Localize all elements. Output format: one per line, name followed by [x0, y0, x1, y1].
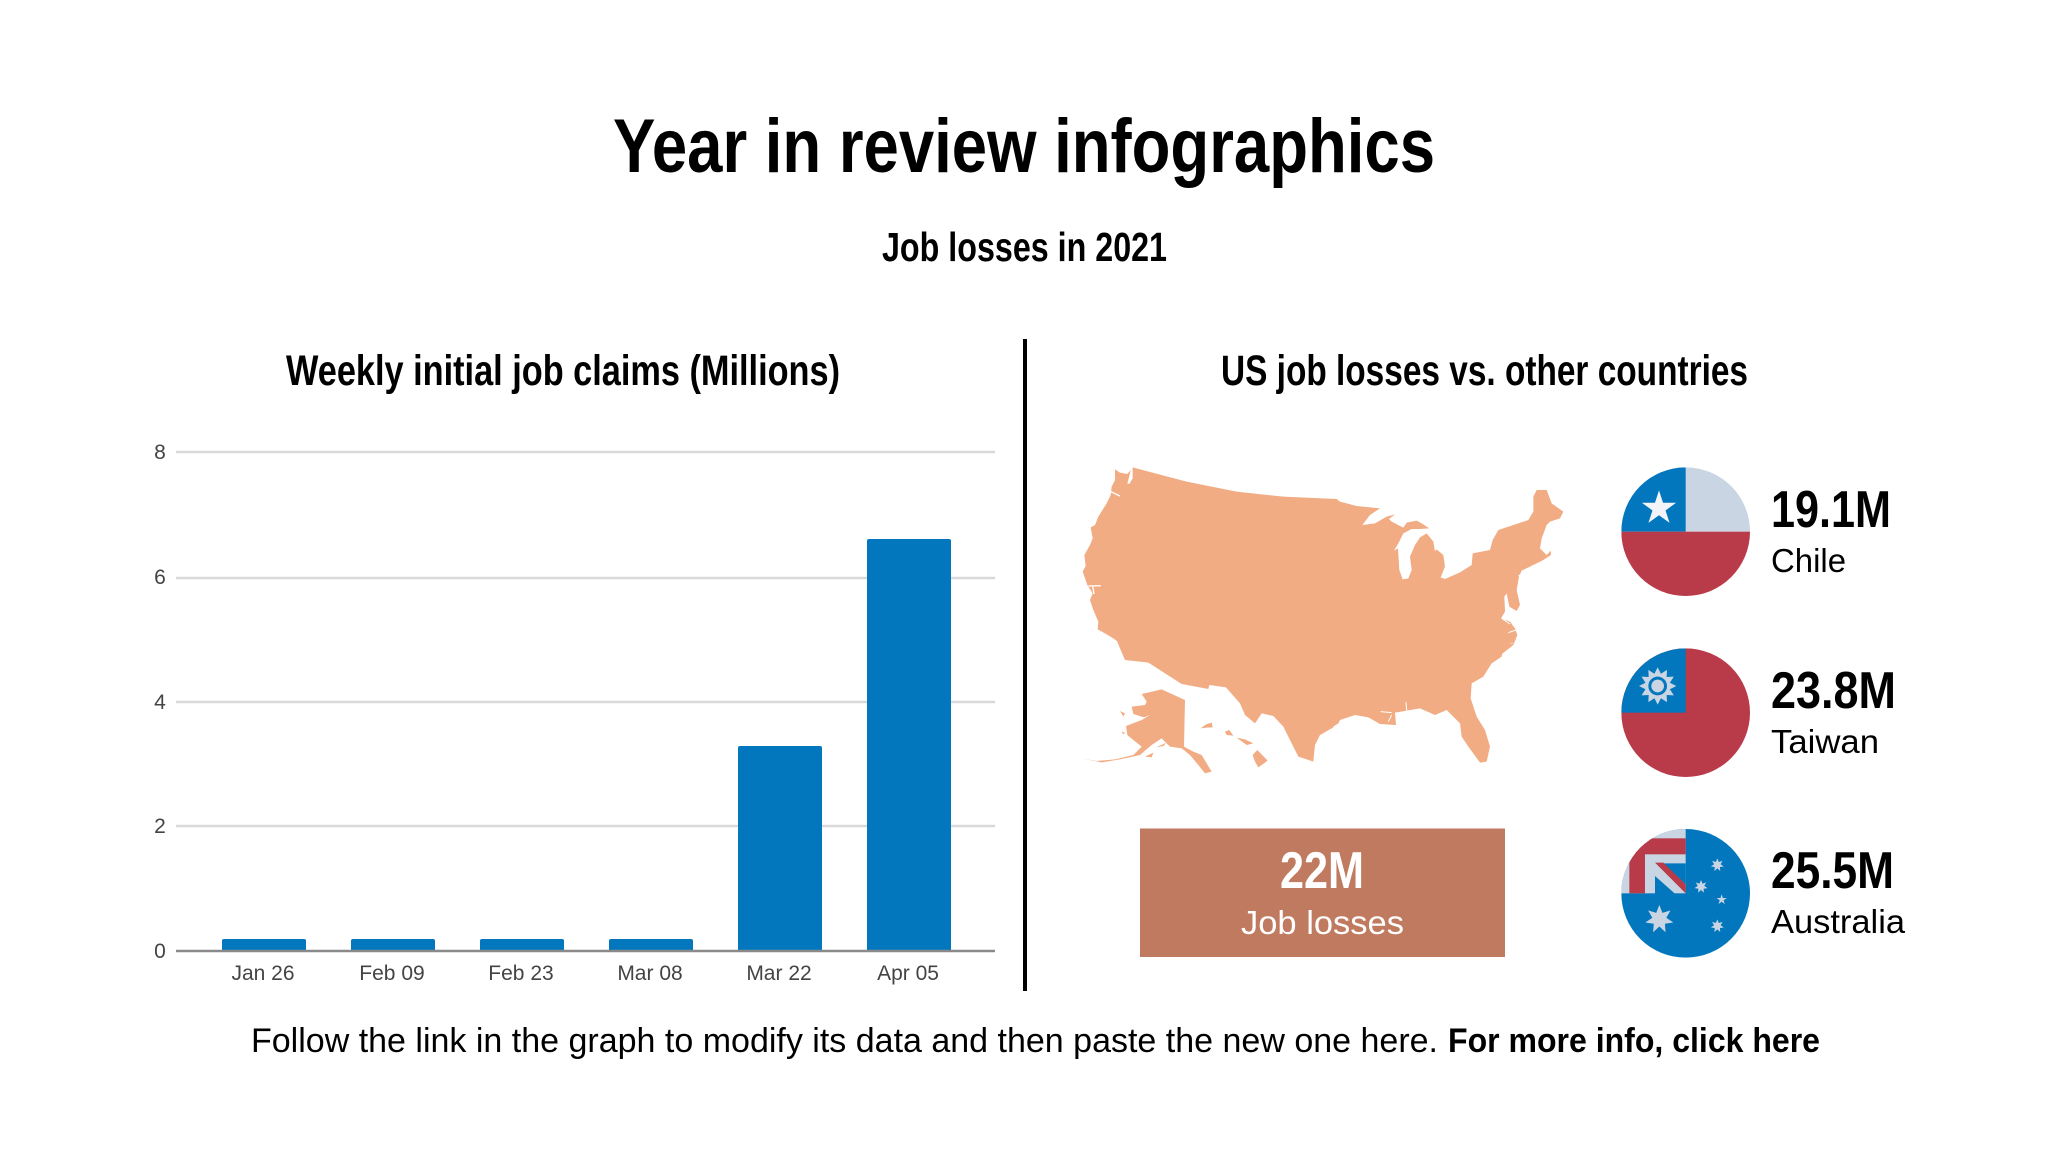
bar chart: 6	[154, 566, 166, 589]
heading: weekly job claims: Weekly initial job claims (Millions)	[286, 347, 840, 395]
stat: Chile 19.1M: 19.1M	[1771, 481, 1891, 539]
bar chart: Mar 08	[617, 962, 683, 985]
subtitle: Job losses in 2021	[882, 224, 1167, 270]
callout: 22M job losses: 22M	[1280, 842, 1364, 900]
panel: weekly initial job claims	[154, 347, 995, 985]
stat: Chile 19.1M	[1771, 481, 1891, 579]
bar chart: Feb 23	[488, 962, 554, 985]
footer note: Follow the link in the graph to modify its data and then paste the new one here.	[251, 1022, 1438, 1060]
bar chart: 4	[154, 691, 166, 714]
bar chart: 8	[154, 441, 166, 464]
title: Year in review infographics	[613, 104, 1435, 189]
bar chart	[154, 441, 995, 985]
stat: Taiwan 23.8M	[1771, 662, 1896, 760]
bar chart: Feb 09	[359, 962, 425, 985]
stat: Taiwan 23.8M: Taiwan	[1771, 723, 1879, 760]
stat: Australia 25.5M: 25.5M	[1771, 842, 1894, 900]
map: United States	[1082, 467, 1563, 773]
heading: US vs other countries: US job losses vs. other countries	[1221, 347, 1748, 395]
flag icon: Chile	[1621, 467, 1750, 596]
bar chart: Mar 22	[746, 962, 812, 985]
flag icon: Australia	[1621, 829, 1750, 958]
divider	[1023, 339, 1027, 991]
bar chart: 2	[154, 815, 166, 838]
footer note: For more info, click here	[1448, 1022, 1820, 1060]
bar chart: Jan 26	[231, 962, 295, 985]
callout: 22M job losses	[1140, 828, 1505, 957]
stat: Chile 19.1M: Chile	[1771, 542, 1846, 579]
bar chart: 0	[154, 940, 166, 963]
callout: 22M job losses: Job losses	[1241, 904, 1404, 941]
stat: Australia 25.5M	[1771, 842, 1906, 940]
bar chart: Apr 05	[877, 962, 939, 985]
stat: Australia 25.5M: Australia	[1771, 903, 1906, 940]
panel: US job losses vs other countries	[1082, 347, 1906, 958]
stat: Taiwan 23.8M: 23.8M	[1771, 662, 1896, 720]
flag icon: Taiwan	[1621, 648, 1750, 777]
